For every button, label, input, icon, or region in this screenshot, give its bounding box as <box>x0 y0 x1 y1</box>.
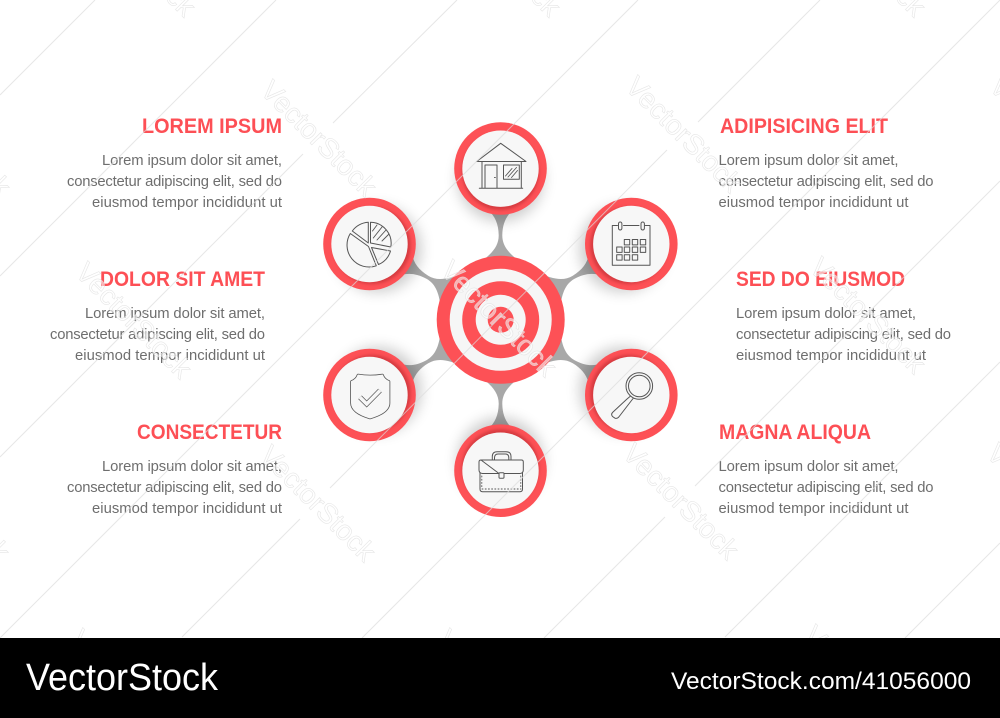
heading and text: Consectetur: CONSECTETUR <box>137 420 282 444</box>
circle: bottom, briefcase <box>454 418 547 517</box>
heading and text: Sed Do Eiusmod: consectetur adipiscing elit, sed do <box>736 327 951 343</box>
circle: upper right, calendar <box>580 198 678 292</box>
footer band <box>0 638 1000 718</box>
footer logo text: VectorStock <box>26 657 219 699</box>
icon: shield <box>352 375 389 418</box>
heading and text: Adipisicing Elit: eiusmod tempor incididunt ut <box>718 195 908 211</box>
icon: magnifier <box>612 373 653 418</box>
heading and text: Magna Aliqua: consectetur adipiscing elit, sed do <box>718 480 934 496</box>
watermark: VectorStock text: V <box>798 619 833 655</box>
heading and text: Sed Do Eiusmod: SED DO EIUSMOD <box>736 267 905 291</box>
heading and text: Consectetur: consectetur adipiscing elit, sed do <box>67 480 282 496</box>
heading and text: Dolor Sit Amet: DOLOR SIT AMET <box>100 267 265 291</box>
watermark: VectorStock text: VectorStock <box>435 254 563 383</box>
heading and text: Adipisicing Elit: ADIPISICING ELIT <box>720 114 888 138</box>
heading and text: Lorem Ipsum <box>67 114 282 211</box>
heading and text: Consectetur <box>67 420 282 517</box>
heading and text: Lorem Ipsum: LOREM IPSUM <box>142 114 282 138</box>
heading and text: Magna Aliqua: MAGNA ALIQUA <box>719 420 871 444</box>
heading and text: Sed Do Eiusmod: Lorem ipsum dolor sit amet, <box>736 306 916 322</box>
heading and text: Sed Do Eiusmod: eiusmod tempor incididunt ut <box>736 348 926 364</box>
heading and text: Magna Aliqua: Lorem ipsum dolor sit amet, <box>718 459 898 475</box>
circle: top, house <box>454 122 547 222</box>
heading and text: Consectetur: eiusmod tempor incididunt ut <box>92 501 282 517</box>
heading and text: Dolor Sit Amet: Lorem ipsum dolor sit amet, <box>85 306 265 322</box>
watermark: VectorStock text: VectorStock <box>70 256 198 385</box>
heading and text: Magna Aliqua <box>718 420 934 517</box>
watermark: VectorStock text: V <box>65 623 100 659</box>
icon: house <box>477 143 526 188</box>
heading and text: Magna Aliqua: eiusmod tempor incididunt ut <box>718 501 908 517</box>
heading and text: Adipisicing Elit: Lorem ipsum dolor sit amet, <box>718 153 898 169</box>
watermark: VectorStock text: VectorStock <box>620 70 748 199</box>
heading and text: Adipisicing Elit <box>718 114 934 211</box>
watermark: VectorStock text: VectorStock <box>804 251 932 380</box>
connectors between target and circles <box>394 210 607 429</box>
icon: calendar <box>612 222 650 265</box>
watermark: VectorStock text: VectorStock <box>254 439 382 568</box>
circle: lower right, magnifier <box>580 347 678 441</box>
footer url: VectorStock.com/41056000 <box>671 668 971 695</box>
heading and text: Adipisicing Elit: consectetur adipiscing elit, sed do <box>718 174 934 190</box>
icon: pie chart <box>347 222 391 267</box>
watermark: VectorStock text: V <box>432 623 467 659</box>
heading and text: Dolor Sit Amet: consectetur adipiscing elit, sed do <box>50 327 265 343</box>
heading and text: Lorem Ipsum: consectetur adipiscing elit, sed do <box>67 174 282 190</box>
heading and text: Lorem Ipsum: Lorem ipsum dolor sit amet, <box>102 153 282 169</box>
icon: briefcase <box>479 452 523 492</box>
heading and text: Lorem Ipsum: eiusmod tempor incididunt ut <box>92 195 282 211</box>
center target <box>437 256 565 384</box>
watermark: VectorStock text: VectorStock <box>617 437 745 566</box>
heading and text: Dolor Sit Amet: eiusmod tempor incididunt ut <box>75 348 265 364</box>
heading and text: Consectetur: Lorem ipsum dolor sit amet, <box>102 459 282 475</box>
circle: lower left, shield <box>323 347 421 441</box>
heading and text: Dolor Sit Amet <box>50 267 265 364</box>
watermark: VectorStock text: VectorStock <box>255 74 383 203</box>
heading and text: Sed Do Eiusmod <box>736 267 951 364</box>
circle: upper left, pie chart <box>323 198 421 292</box>
